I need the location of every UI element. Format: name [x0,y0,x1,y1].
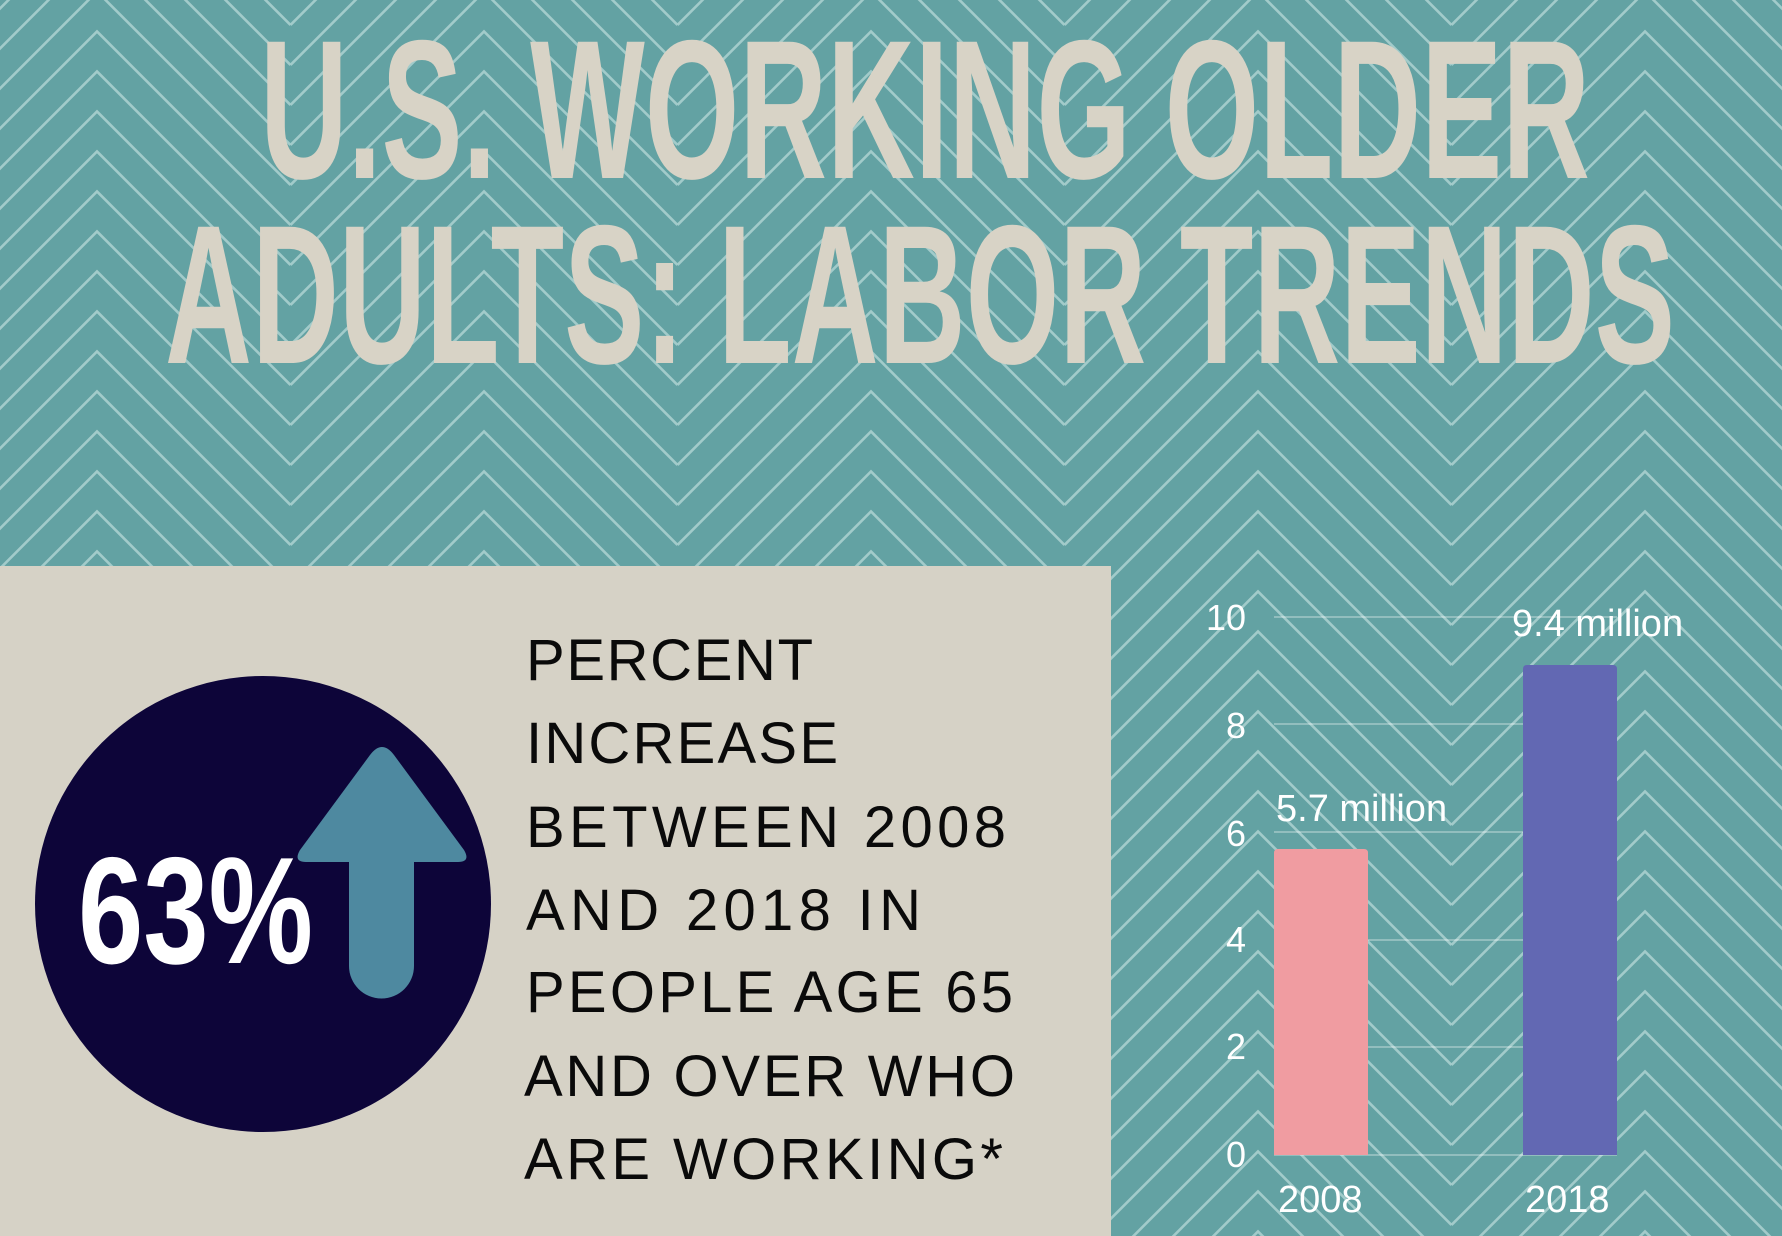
arrow: up [298,747,466,998]
icon: circle badge [35,676,491,1132]
text block: description: AND 2018 IN [526,878,921,943]
text block: description: PERCENT [526,628,813,693]
title [165,0,1675,405]
y axis labels: 4 [1226,919,1246,960]
bar: 2008 [1274,849,1368,1155]
y axis labels [1206,597,1246,1175]
text block: description: AND OVER WHO [524,1044,1015,1109]
y axis labels: 2 [1226,1026,1246,1067]
text block: description: PEOPLE AGE 65 [526,960,1013,1025]
bar chart [1206,597,1683,1221]
bar chart: 2018 [1525,1179,1610,1221]
y axis labels: 8 [1226,705,1246,746]
x axis labels: 2008 [1278,1179,1363,1221]
y axis labels: 0 [1226,1134,1246,1175]
text block: description [524,628,1015,1192]
text block: description: ARE WORKING* [524,1127,1003,1192]
bar: 2018 [1523,665,1617,1155]
text block: description: BETWEEN 2008 [526,795,1006,860]
bar chart: 9.4 million [1512,603,1683,645]
panel: statistic [0,566,1111,1236]
value labels: 5.7 million [1276,788,1447,830]
big number: 63% [78,826,313,996]
y axis labels: 6 [1226,813,1246,854]
y axis labels: 10 [1206,597,1246,638]
text block: description: INCREASE [526,711,838,776]
